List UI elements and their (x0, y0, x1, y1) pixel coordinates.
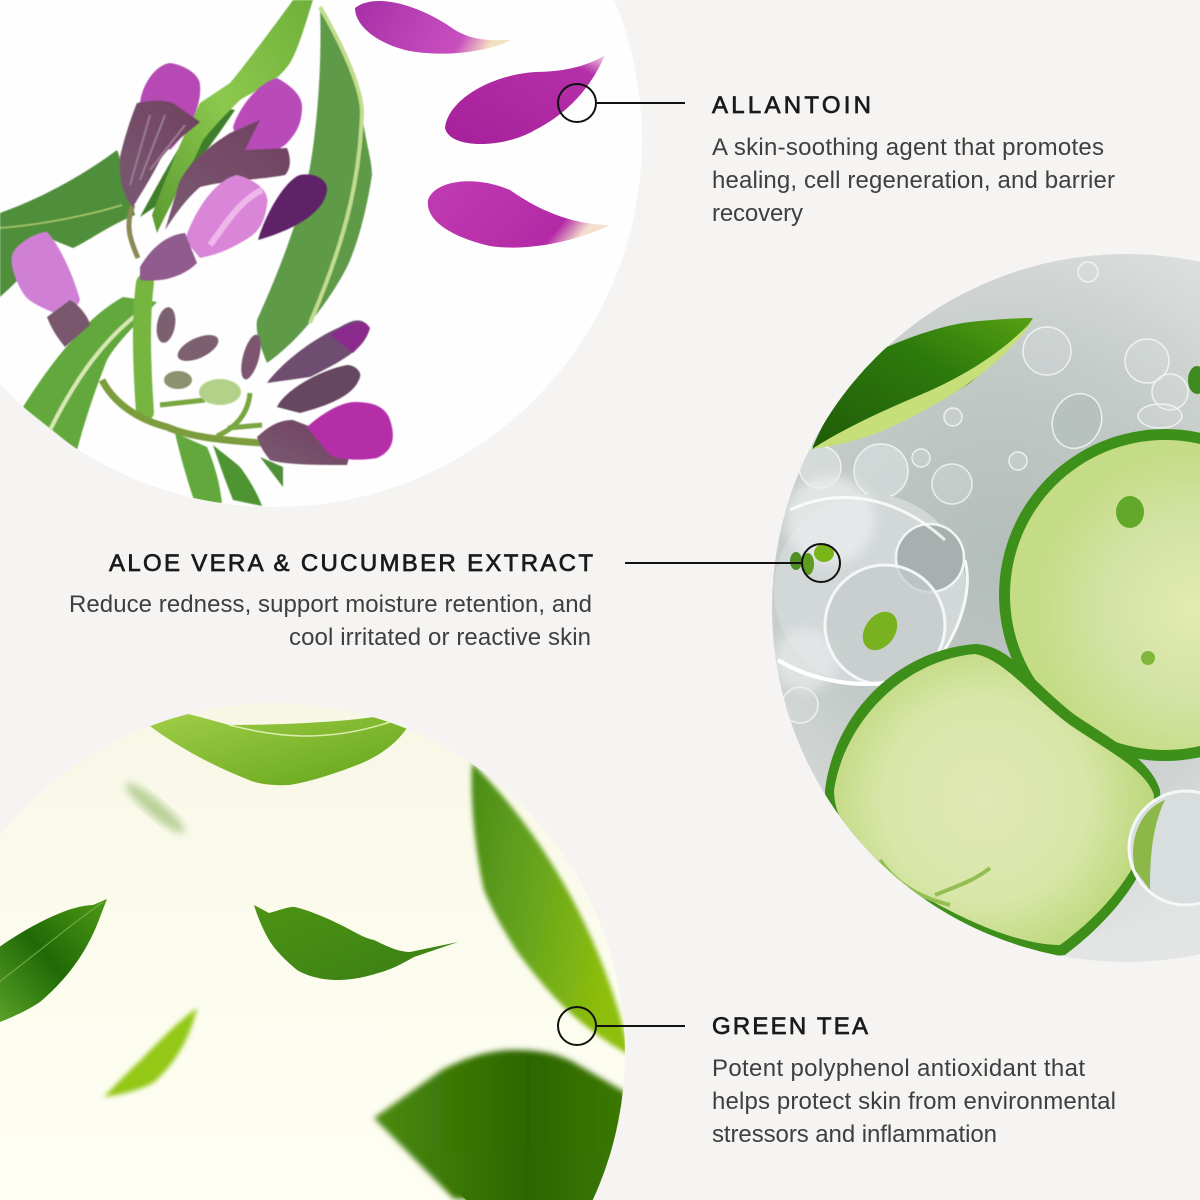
text block: aloe vera and cucumber extract (69, 550, 593, 651)
description: allantoin: recovery (712, 200, 803, 227)
description: aloe vera and cucumber extract: Reduce redness, support moisture retention, and (69, 591, 592, 618)
blurred leaf bottom (374, 1050, 630, 1200)
description: allantoin: healing, cell regeneration, and barrier (712, 167, 1115, 194)
small water bubbles (782, 262, 1188, 723)
panel: allantoin comfrey photo circle (0, 0, 645, 510)
callout marker: allantoin (558, 84, 685, 122)
blurred leaf right (472, 763, 630, 1055)
description: aloe vera and cucumber extract: cool irritated or reactive skin (289, 624, 591, 651)
callout marker: green tea (558, 1007, 685, 1045)
leaf left (0, 899, 107, 1024)
petals (355, 1, 610, 248)
description: green tea: helps protect skin from environmental (712, 1088, 1116, 1115)
blurred leaf small top (121, 777, 189, 839)
heading: green tea: GREEN TEA (712, 1013, 868, 1040)
heading: aloe vera and cucumber extract: ALOE VERA & CUCUMBER EXTRACT (109, 550, 593, 577)
description: green tea: Potent polyphenol antioxidant that (712, 1055, 1085, 1082)
description: allantoin: A skin-soothing agent that promotes (712, 134, 1104, 161)
panel: green tea photo circle (0, 700, 630, 1200)
blurred leaf lower left (104, 1008, 197, 1097)
text block: green tea (712, 1013, 1116, 1148)
description: aloe vera and cucumber extract (69, 591, 592, 651)
green droplets (790, 366, 1200, 657)
description: allantoin (712, 134, 1115, 227)
leaf centre (254, 905, 458, 980)
heading: allantoin: ALLANTOIN (712, 92, 871, 119)
central water bubble cluster (773, 475, 967, 692)
leaves and stems (0, 0, 372, 506)
panel: aloe vera and cucumber photo circle (770, 250, 1200, 965)
description: green tea (712, 1055, 1116, 1148)
cucumber peel (812, 318, 1033, 449)
bottom right bubble (1128, 790, 1200, 906)
cucumber slice back (999, 429, 1200, 761)
cucumber slice front (825, 644, 1160, 956)
comfrey buds (12, 63, 393, 465)
leaf top (139, 710, 407, 785)
callout marker: aloe vera and cucumber (625, 544, 840, 582)
description: green tea: stressors and inflammation (712, 1121, 997, 1148)
text block: allantoin (712, 92, 1115, 227)
